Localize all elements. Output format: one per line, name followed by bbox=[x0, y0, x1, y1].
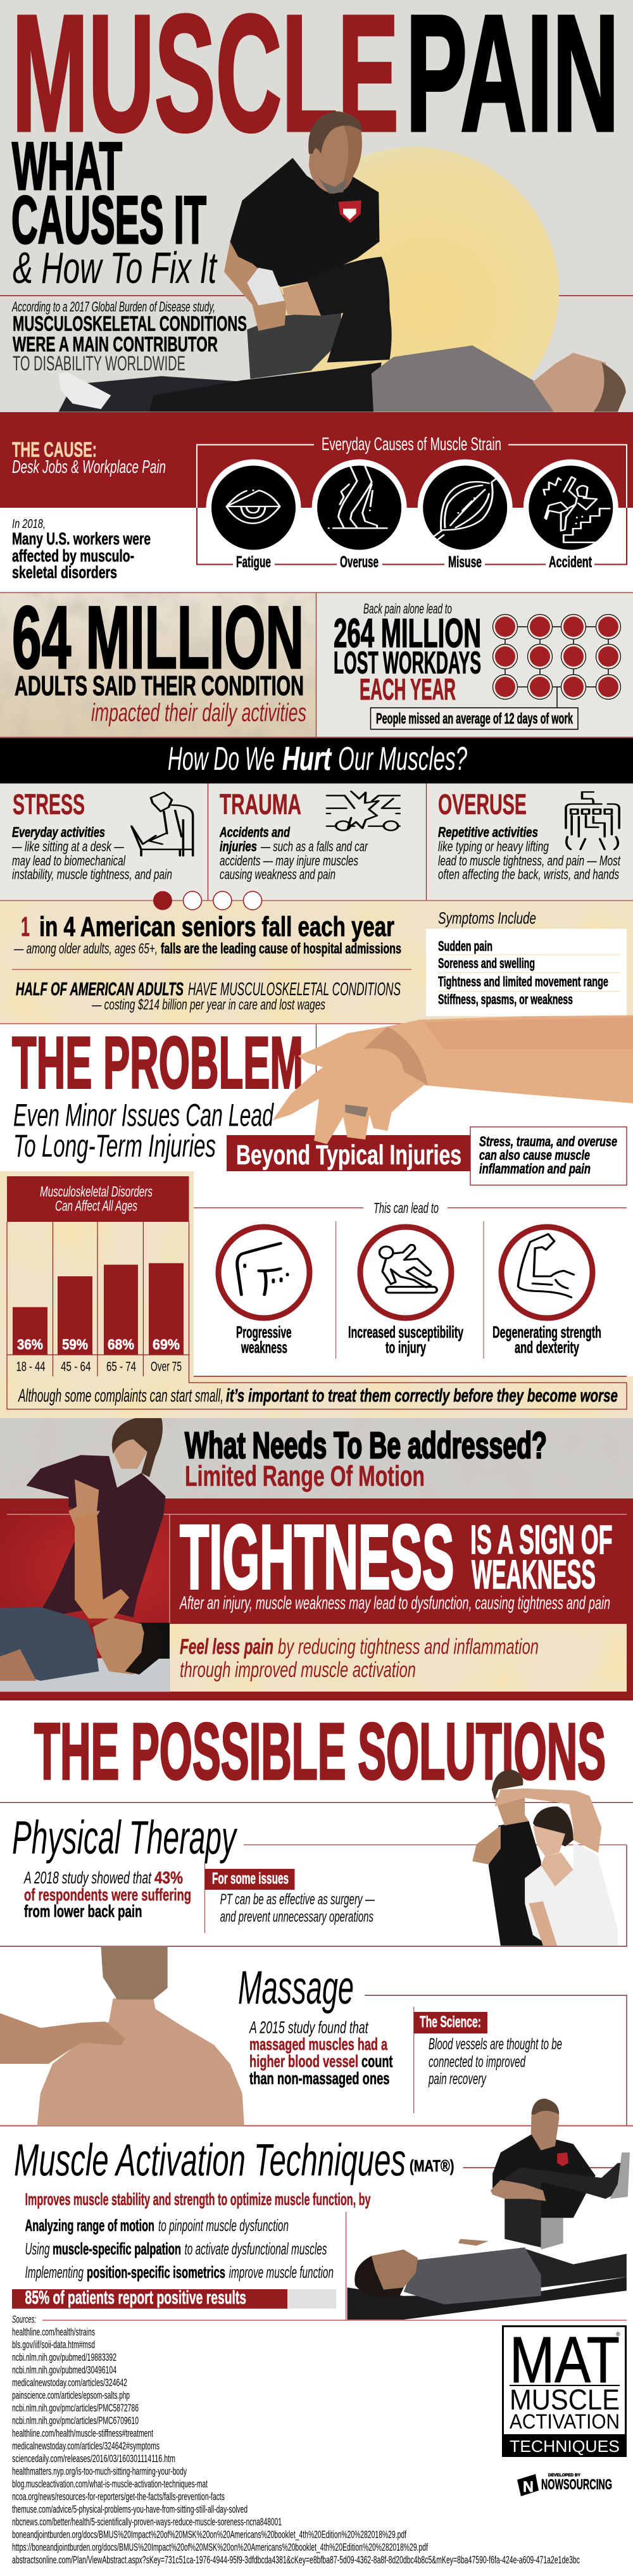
bar chart: disorders by age: 36% bbox=[17, 1336, 43, 1353]
study text: A 2015 study found that bbox=[249, 2018, 369, 2037]
red box: beyond typical injuries bbox=[227, 1135, 470, 1171]
stress column: instability, muscle tightness, and pain bbox=[12, 867, 172, 883]
intro text bbox=[11, 299, 247, 375]
subtitle: WHAT bbox=[12, 128, 122, 204]
trauma column: accidents — may injure muscles bbox=[220, 853, 358, 869]
stat: half of adults: — costing $214 billion per year in care and lost wages bbox=[91, 996, 325, 1013]
sources: ncoa.org/news/resources-for-reporters/get-the-facts/falls-prevention-facts bbox=[12, 2491, 225, 2503]
bar chart: disorders by age bbox=[7, 1176, 627, 1383]
icons: desk worker, car crash, keyboard hands bbox=[132, 791, 619, 856]
overuse column bbox=[438, 788, 621, 883]
big stat: 64 million: 64 MILLION bbox=[12, 587, 304, 687]
panel: what needs to be addressed bbox=[0, 1418, 633, 1700]
photo: assisted shoulder stretch bbox=[472, 1769, 618, 1945]
trauma column: Accidents and bbox=[219, 824, 290, 840]
cause labels bbox=[236, 553, 592, 571]
photo: hand and arm bbox=[273, 1015, 633, 1144]
tan callout: feel less pain: through improved muscle activation bbox=[180, 1658, 416, 1682]
benefit list: muscle-specific palpation bbox=[53, 2239, 181, 2258]
callout: 12 days bbox=[371, 708, 578, 729]
heading: Massage bbox=[238, 1961, 354, 2014]
study text: A 2018 study showed that bbox=[23, 1868, 152, 1887]
tan callout: feel less pain: Feel less pain bbox=[180, 1635, 273, 1659]
sources: blog.muscleactivation.com/what-is-muscle-activation-techniques-mat bbox=[12, 2478, 208, 2490]
callout: treat correctly bbox=[7, 1376, 627, 1409]
heading: this can lead to: This can lead to bbox=[373, 1200, 439, 1216]
progress dots bbox=[153, 891, 262, 910]
stat: affected workers: affected by musculo- bbox=[12, 546, 134, 565]
bar chart: disorders by age: Over 75 bbox=[151, 1360, 182, 1374]
sources bbox=[12, 2313, 580, 2566]
panel: the cause bbox=[0, 412, 633, 593]
intro text: WERE A MAIN CONTRIBUTOR bbox=[13, 332, 218, 356]
logo: MAT muscle activation techniques: TECHNIQUES bbox=[510, 2437, 620, 2456]
sources: medicalnewstoday.com/articles/324642#symptoms bbox=[12, 2440, 160, 2452]
sources: Sources: bbox=[12, 2313, 36, 2325]
dot grid: lost workdays bbox=[492, 614, 620, 708]
stat: half of adults: HALF OF AMERICAN ADULTS bbox=[16, 979, 184, 1000]
symptoms box: Symptoms Include bbox=[438, 908, 536, 927]
benefit list: Improves muscle stability and strength to optimize muscle function, by bbox=[25, 2190, 371, 2209]
panel: 64 million bbox=[0, 587, 633, 738]
tag note: the science bbox=[414, 2007, 562, 2113]
big stat: 64 million: ADULTS SAID THEIR CONDITION bbox=[15, 670, 304, 701]
divider line bbox=[0, 295, 633, 296]
intro text: According to a 2017 Global Burden of Disease study, bbox=[11, 299, 215, 315]
benefit list: Analyzing range of motion bbox=[25, 2216, 154, 2235]
hero panel bbox=[0, 0, 633, 436]
bar chart: disorders by age: 69% bbox=[153, 1336, 180, 1353]
study text: 43% bbox=[154, 1868, 183, 1887]
consequence labels bbox=[236, 1323, 601, 1357]
photo: therapist stretching patient bbox=[58, 111, 626, 412]
sources: ncbi.nlm.nih.gov/pmc/articles/PMC5872786 bbox=[12, 2402, 139, 2414]
sources: healthmatters.nyp.org/is-too-much-sitting-harming-your-body bbox=[12, 2465, 187, 2477]
logo: MAT muscle activation techniques: ® bbox=[616, 2331, 620, 2337]
trauma column bbox=[219, 788, 368, 883]
icons: knee, falling person, arm bbox=[237, 1234, 573, 1297]
section banner: how do we hurt our muscles: How Do We bbox=[168, 741, 275, 777]
heading bbox=[185, 1425, 547, 1492]
overuse column: OVERUSE bbox=[438, 788, 527, 820]
logo: developed by nowsourcing bbox=[517, 2473, 612, 2496]
bar chart: disorders by age: Musculoskeletal Disorders bbox=[40, 1183, 153, 1200]
benefit list: Using bbox=[25, 2239, 50, 2258]
bar chart: disorders by age: 45 - 64 bbox=[61, 1360, 91, 1374]
benefit list: to activate dysfunctional muscles bbox=[185, 2239, 327, 2258]
heading: Muscle Activation Techniques bbox=[14, 2136, 406, 2186]
stat: 1 in 4 seniors: — among older adults, ages 65+, bbox=[13, 940, 158, 957]
symptoms box: Soreness and swelling bbox=[438, 955, 535, 971]
benefit list: position-specific isometrics bbox=[87, 2263, 225, 2282]
consequence labels: to injury bbox=[385, 1338, 426, 1357]
sources: healthline.com/health/strains bbox=[12, 2326, 95, 2338]
study text: from lower back pain bbox=[24, 1902, 142, 1921]
subtitle: & How To Fix It bbox=[13, 243, 218, 292]
intro text: MUSCULOSKELETAL CONDITIONS bbox=[13, 312, 247, 336]
logo: MAT muscle activation techniques: MUSCLE bbox=[510, 2384, 620, 2416]
sources: painscience.com/articles/epsom-salts.php bbox=[12, 2389, 130, 2401]
stat: lost workdays: LOST WORKDAYS bbox=[334, 646, 481, 681]
cause labels: Accident bbox=[549, 553, 592, 571]
consequence labels: Progressive bbox=[236, 1323, 291, 1341]
trauma column: TRAUMA bbox=[220, 788, 301, 820]
problem subheading bbox=[13, 1098, 274, 1164]
section banner: how do we hurt our muscles: Our Muscles? bbox=[338, 741, 467, 777]
benefit list: Implementing bbox=[25, 2263, 84, 2282]
logo: MAT muscle activation techniques: ACTIVATION bbox=[510, 2410, 620, 2433]
benefit list: to pinpoint muscle dysfunction bbox=[158, 2216, 289, 2235]
big stat: 64 million bbox=[12, 587, 306, 727]
cause heading bbox=[12, 438, 166, 477]
trauma column: injuries bbox=[220, 839, 257, 855]
tag note: the science: The Science: bbox=[420, 2013, 481, 2031]
sources: sciencedaily.com/releases/2016/03/160301114116.htm bbox=[12, 2453, 175, 2465]
big stat: 64 million: impacted their daily activities bbox=[91, 699, 306, 727]
stress column: STRESS bbox=[13, 788, 85, 820]
sources: healthline.com/health/muscle-stiffness#treatment bbox=[12, 2427, 153, 2439]
panel: muscle activation techniques bbox=[12, 2099, 630, 2566]
photo: therapist with lying patient bbox=[0, 1418, 170, 1692]
sources: themuse.com/advice/5-physical-problems-you-have-from-sitting-still-all-day-solved bbox=[12, 2503, 248, 2515]
icon rings: consequences bbox=[218, 1227, 592, 1318]
cause labels: Fatigue bbox=[236, 553, 271, 571]
sources: ncbi.nlm.nih.gov/pubmed/30496104 bbox=[12, 2364, 116, 2376]
benefit list: improve muscle function bbox=[229, 2263, 334, 2282]
cause heading: Desk Jobs & Workplace Pain bbox=[12, 457, 166, 477]
stat: affected workers: Many U.S. workers were bbox=[12, 529, 151, 548]
stat: half of adults: HAVE MUSCULOSKELETAL CONDITIONS bbox=[188, 979, 401, 1000]
cause labels: Misuse bbox=[448, 553, 482, 571]
photo: neck massage bbox=[0, 1946, 244, 2126]
stat: 1 in 4 seniors: in 4 American seniors fall each year bbox=[39, 912, 394, 943]
tan callout: feel less pain bbox=[170, 1624, 627, 1692]
causes frame bbox=[197, 444, 314, 508]
sources: medicalnewstoday.com/articles/324642 bbox=[12, 2377, 127, 2389]
stat: half of adults bbox=[16, 979, 401, 1013]
study text: higher blood vessel bbox=[249, 2052, 358, 2071]
consequence labels: weakness bbox=[241, 1338, 287, 1357]
callout: treat correctly: Although some complaints can start small, bbox=[18, 1386, 223, 1406]
stress column bbox=[11, 788, 172, 883]
cause heading: THE CAUSE: bbox=[12, 438, 97, 461]
panel: the problem bbox=[0, 1022, 633, 1171]
heading: Physical Therapy bbox=[12, 1811, 237, 1864]
subtitle bbox=[11, 128, 218, 292]
study text: count bbox=[361, 2052, 392, 2071]
callout box: inflammation: inflammation and pain bbox=[479, 1161, 591, 1177]
bar chart: disorders by age: 65 - 74 bbox=[106, 1360, 136, 1374]
cause labels: Overuse bbox=[340, 553, 379, 571]
stat: 1 in 4 seniors: 1 bbox=[21, 912, 30, 943]
consequence labels: Increased susceptibility bbox=[348, 1323, 463, 1341]
stat: lost workdays: 264 MILLION bbox=[334, 610, 481, 656]
bar chart: disorders by age: 18 - 44 bbox=[16, 1360, 46, 1374]
symptoms box: Sudden pain bbox=[438, 938, 492, 954]
cause circles bbox=[197, 460, 627, 558]
red box: beyond typical injuries: Beyond Typical Injuries bbox=[236, 1140, 461, 1171]
trauma column: — such as a falls and car bbox=[260, 839, 368, 855]
stat: affected workers bbox=[12, 517, 151, 582]
panel: massage bbox=[0, 1946, 633, 2126]
progress bar: 85 percent: 85% of patients report positive results bbox=[25, 2287, 246, 2308]
tag note: the science: connected to improved bbox=[429, 2053, 526, 2071]
problem subheading: Even Minor Issues Can Lead bbox=[13, 1098, 274, 1133]
stat: lost workdays bbox=[334, 601, 481, 706]
yellow sun circle bbox=[270, 147, 559, 436]
stat: affected workers: skeletal disorders bbox=[12, 563, 117, 582]
study text bbox=[249, 2018, 392, 2088]
stat: lost workdays: EACH YEAR bbox=[360, 672, 456, 706]
panel: three causes bbox=[0, 784, 633, 900]
subtitle: CAUSES IT bbox=[11, 182, 206, 258]
stat: 1 in 4 seniors bbox=[13, 912, 401, 957]
trauma column: causing weakness and pain bbox=[220, 867, 335, 883]
stress column: may lead to biomechanical bbox=[12, 853, 126, 869]
intro text: TO DISABILITY WORLDWIDE bbox=[13, 352, 185, 375]
logo: MAT muscle activation techniques bbox=[502, 2323, 627, 2457]
tag note: for some issues: For some issues bbox=[212, 1870, 289, 1888]
section banner: how do we hurt our muscles bbox=[0, 738, 633, 784]
study text: of respondents were suffering bbox=[24, 1885, 191, 1904]
logo: developed by nowsourcing: N bbox=[523, 2479, 534, 2496]
stat: affected workers: In 2018, bbox=[12, 517, 46, 531]
causes frame title: Everyday Causes of Muscle Strain bbox=[322, 434, 501, 455]
panel: falls statistics bbox=[0, 891, 633, 1024]
sources: ncbi.nlm.nih.gov/pmc/articles/PMC6709610 bbox=[12, 2415, 139, 2427]
sources: bls.gov/iif/soii-data.htm#msd bbox=[12, 2339, 95, 2351]
tag note: the science: pain recovery bbox=[428, 2070, 487, 2088]
stress column: — like sitting at a desk — bbox=[11, 839, 125, 855]
sources: ncbi.nlm.nih.gov/pubmed/19883392 bbox=[12, 2351, 116, 2363]
study text bbox=[23, 1868, 191, 1921]
symptoms box bbox=[426, 908, 627, 1016]
callout box: inflammation: can also cause muscle bbox=[479, 1147, 590, 1163]
tag note: for some issues: PT can be as effective as surgery — bbox=[220, 1891, 375, 1908]
problem heading: THE PROBLEM bbox=[12, 1022, 303, 1104]
panel: physical therapy bbox=[0, 1769, 633, 1946]
overuse column: Repetitive activities bbox=[438, 824, 538, 840]
section banner: how do we hurt our muscles: Hurt bbox=[282, 741, 332, 777]
bar chart: disorders by age: 59% bbox=[62, 1336, 88, 1353]
heading: (MAT®) bbox=[410, 2156, 454, 2175]
stat: lost workdays: Back pain alone lead to bbox=[363, 601, 452, 617]
sources: nbcnews.com/better/health/5-scientifically-proven-ways-reduce-muscle-soreness-ncna848001 bbox=[12, 2516, 282, 2528]
tag note: for some issues bbox=[205, 1863, 375, 1933]
bar chart: disorders by age: Can Affect All Ages bbox=[55, 1198, 137, 1214]
photo: MAT therapist and patient bbox=[348, 2099, 630, 2320]
overuse column: like typing or heavy lifting bbox=[438, 839, 549, 855]
tag note: for some issues: and prevent unnecessary operations bbox=[220, 1909, 373, 1926]
heading: Limited Range Of Motion bbox=[185, 1460, 425, 1492]
logo: developed by nowsourcing: DEVELOPED BY bbox=[548, 2473, 581, 2478]
problem subheading: To Long-Term Injuries bbox=[13, 1128, 216, 1164]
study text: than non-massaged ones bbox=[249, 2069, 390, 2088]
benefit list bbox=[25, 2190, 371, 2282]
bar chart: disorders by age: 68% bbox=[108, 1336, 134, 1353]
study text: massaged muscles had a bbox=[249, 2035, 388, 2054]
callout box: inflammation bbox=[470, 1127, 627, 1185]
icons: fatigue overuse misuse accident bbox=[227, 467, 610, 543]
consequence labels: and dexterity bbox=[515, 1338, 579, 1357]
stress column: Everyday activities bbox=[12, 824, 105, 840]
panel: age chart and consequences background bbox=[0, 1171, 633, 1418]
stat: 1 in 4 seniors: falls are the leading cause of hospital admissions bbox=[161, 940, 401, 957]
